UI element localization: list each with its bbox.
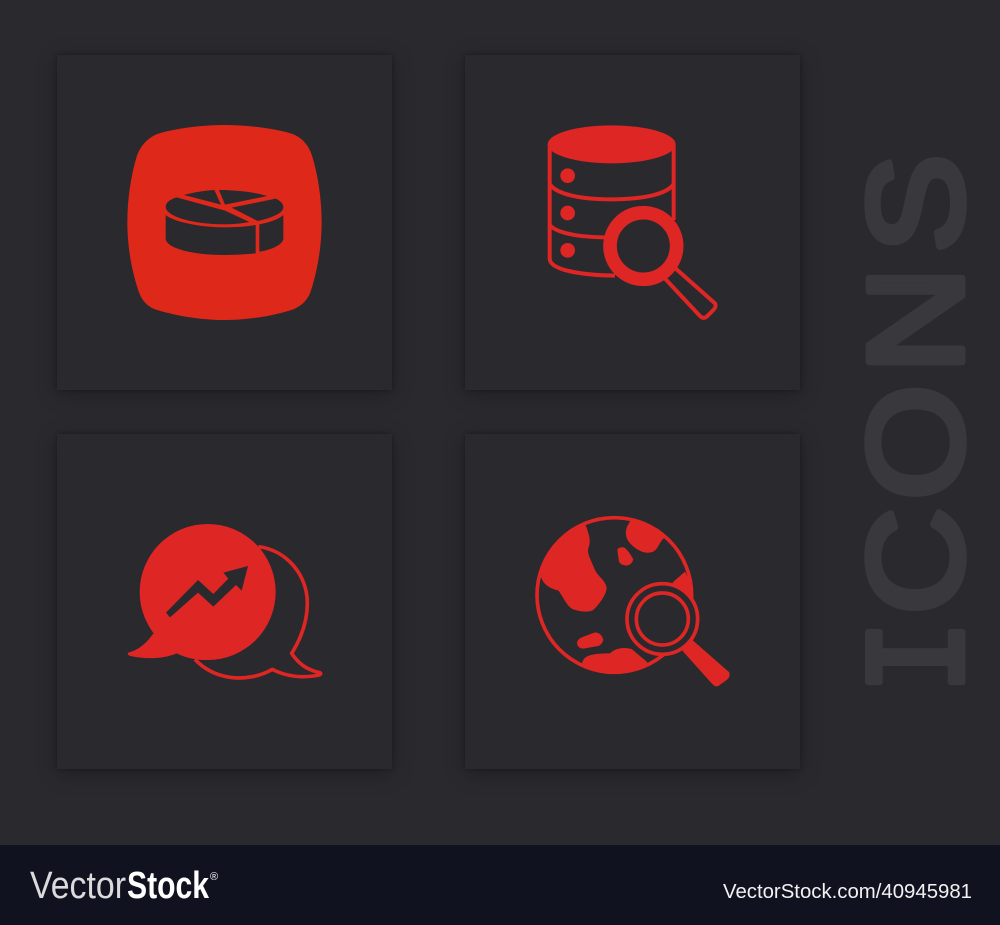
- footer bar: [0, 845, 1000, 925]
- registered mark: ®: [210, 871, 218, 883]
- panel: database search card: [465, 55, 800, 390]
- vertical ICONS wordmark: S: [841, 154, 991, 253]
- icon: pie chart in red squircle: [127, 125, 322, 320]
- icons layer: [127, 125, 967, 686]
- VectorStock logo: Stock: [127, 865, 210, 907]
- panel: chat growth card: [57, 434, 392, 769]
- panel: globe search card: [465, 434, 800, 769]
- VectorStock logo: Vector: [30, 865, 126, 907]
- icon: database with magnifier: [548, 125, 716, 318]
- vertical ICONS wordmark: C: [841, 507, 991, 615]
- vertical ICONS wordmark: [841, 154, 1000, 694]
- icon: speech bubbles with rising arrow: [128, 524, 321, 678]
- panel: pie chart card: [57, 55, 392, 390]
- vertical ICONS wordmark: N: [841, 266, 991, 374]
- vertical ICONS wordmark: O: [841, 384, 991, 500]
- VectorStock logo: [30, 865, 210, 907]
- image id text: VectorStock.com/40945981: [723, 881, 972, 903]
- icon: globe with magnifier: [535, 516, 730, 686]
